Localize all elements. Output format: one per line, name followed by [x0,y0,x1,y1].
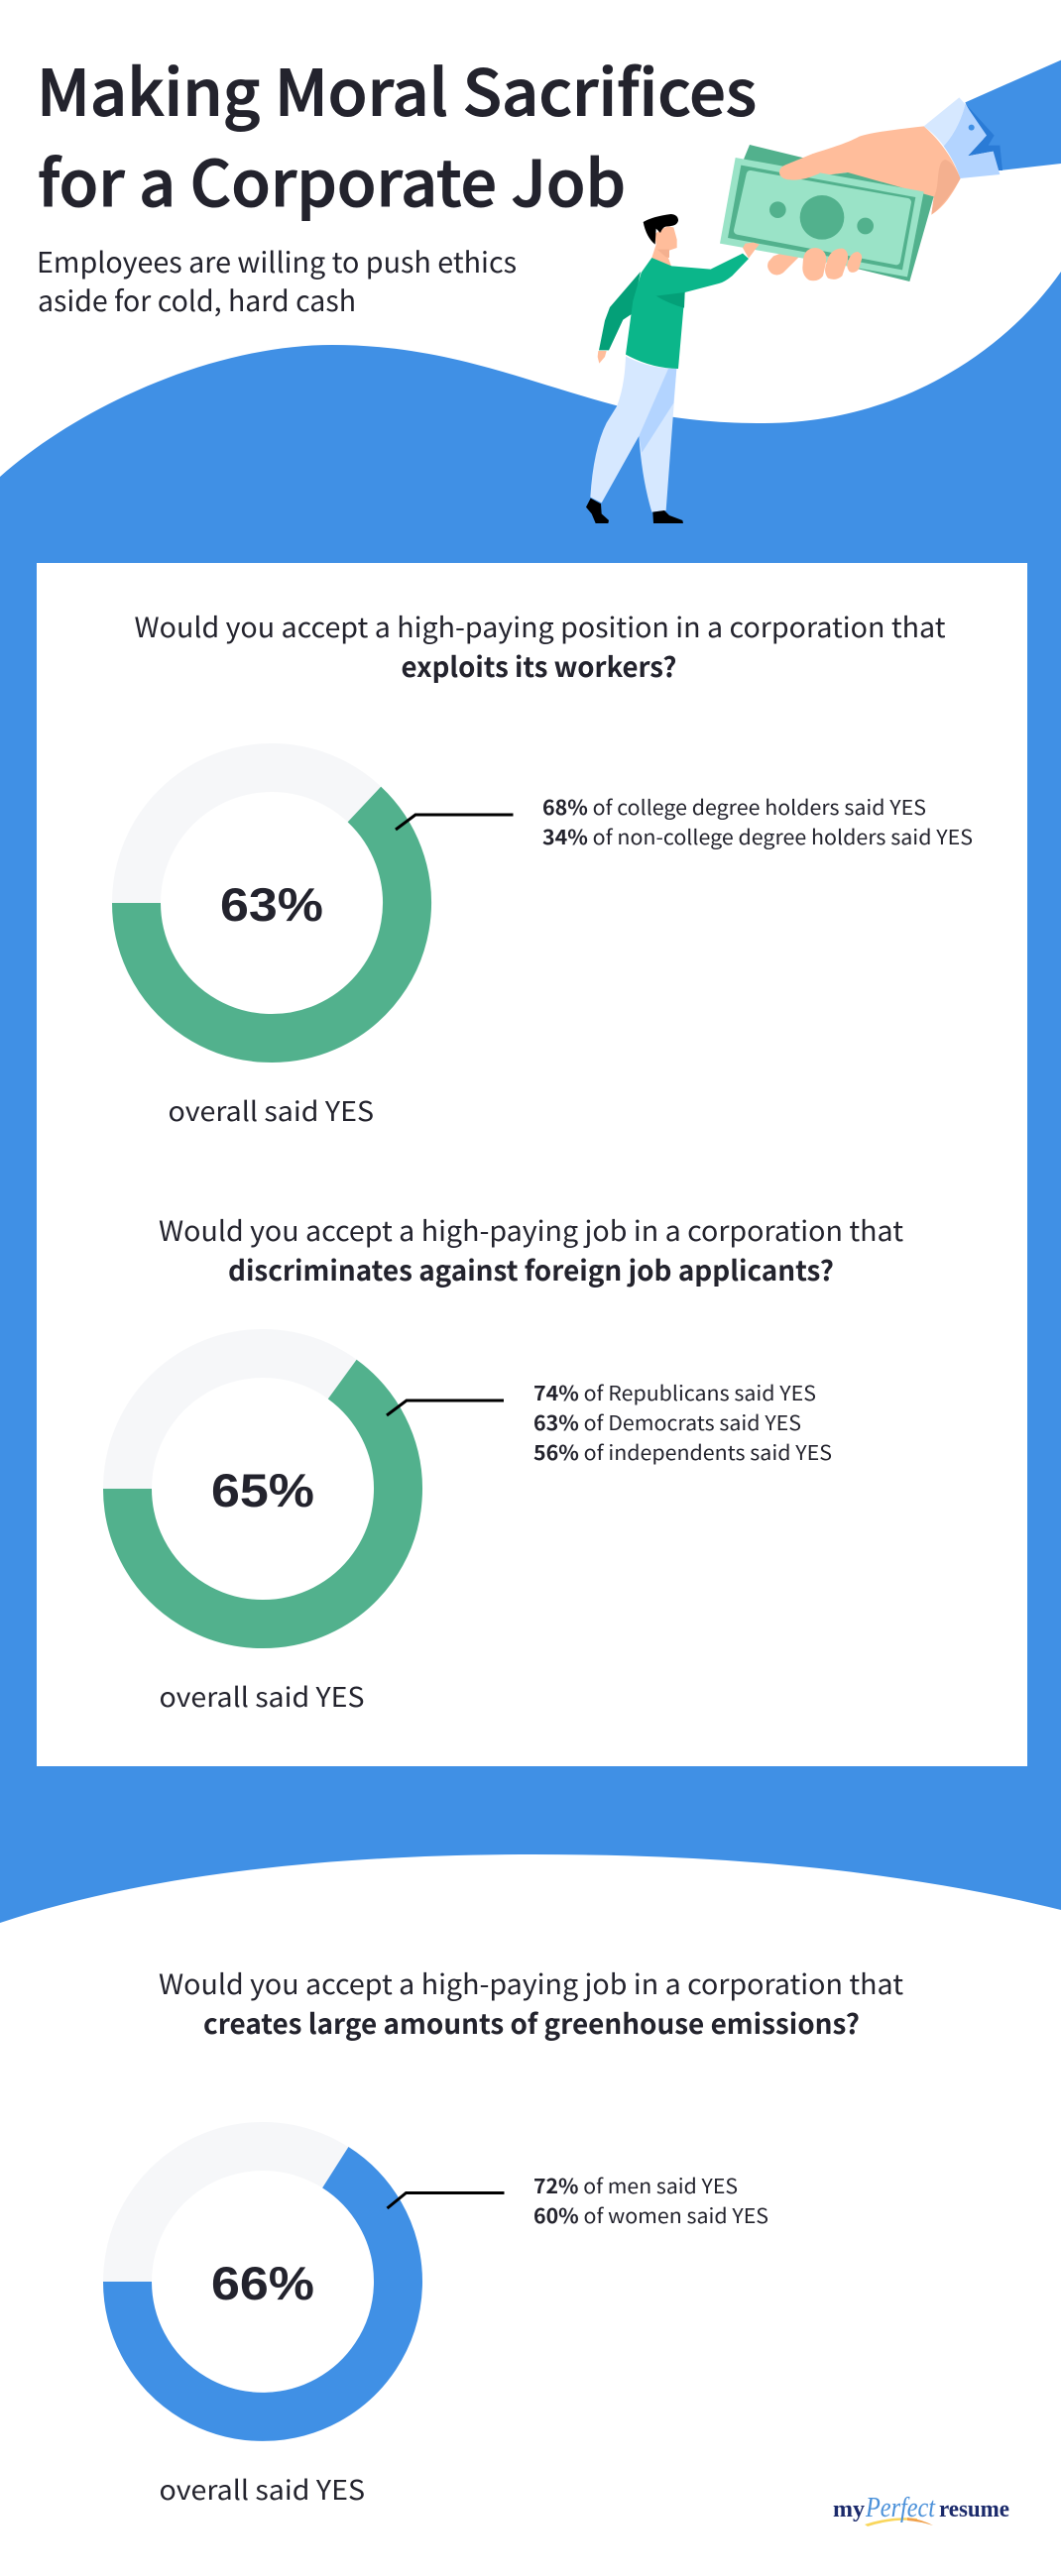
pants [590,356,676,512]
question 1 heading: Would you accept a high-paying position in a corporation that [135,607,946,646]
finger behind cash [767,251,800,275]
question 3 heading: Would you accept a high-paying job in a corporation that [159,1963,903,2003]
lowered hand [598,351,607,364]
question 1 heading: exploits its workers? [401,646,676,686]
stats 2: 56% of independents said YES [533,1436,832,1466]
palm shadow [931,160,961,215]
stats 3: 72% of men said YES [533,2170,738,2199]
callout line 3 [387,2192,504,2208]
question 2 heading: Would you accept a high-paying job in a corporation that [159,1210,903,1250]
icon: man reaching for cash [586,214,760,523]
title: for a Corporate Job [38,134,626,225]
stats 3: 60% of women said YES [533,2199,768,2229]
panel: white survey panel [37,563,1027,1766]
cuff [924,97,1000,178]
stats 1 [542,791,973,850]
shoes [586,499,683,523]
stats 2: 74% of Republicans said YES [533,1377,816,1406]
subtitle [37,241,517,320]
stats 2: 63% of Democrats said YES [533,1406,801,1436]
callout line 2 [387,1400,504,1415]
thumb [779,154,820,180]
callout line 1 [396,815,514,830]
fingers [802,248,862,280]
face and neck [651,226,677,267]
donut chart 63%: 63% [220,878,323,931]
donut chart 63% [136,767,407,1039]
caption 2: overall said YES [159,1676,365,1715]
question 3 heading: creates large amounts of greenhouse emissions? [203,2003,860,2043]
cash front bill [720,158,924,277]
subtitle: Employees are willing to push ethics [37,241,517,281]
logo: my [833,2497,865,2522]
stats 3 [533,2170,768,2229]
stats 1: 68% of college degree holders said YES [542,791,926,821]
cash back bill [754,172,934,281]
stats 1: 34% of non-college degree holders said YES [542,821,973,850]
caption 3: overall said YES [159,2469,365,2508]
title [37,44,757,225]
icon: hand holding cash [720,60,1061,281]
back arm [599,272,641,350]
sweater [626,254,749,369]
logo: Perfect [865,2493,936,2523]
title: Making Moral Sacrifices [37,44,757,135]
hair [644,214,678,245]
donut chart 65%: 65% [211,1464,314,1516]
donut chart 65% [127,1354,399,1624]
logo: resume [939,2497,1009,2522]
cash back edge [744,145,806,171]
raised hand [743,243,760,259]
sleeve [965,60,1061,170]
blue wave background [0,272,1061,1923]
stats 2 [533,1377,832,1466]
subtitle: aside for cold, hard cash [38,280,356,320]
question 1 heading [135,607,946,686]
caption 1: overall said YES [169,1090,374,1129]
question 2 heading: discriminates against foreign job applicants? [228,1250,834,1289]
hand [785,126,961,215]
question 2 heading [159,1210,903,1289]
donut chart 66%: 66% [211,2257,314,2309]
donut chart 66% [127,2147,399,2416]
logo [833,2493,1009,2526]
question 3 heading [159,1963,903,2043]
